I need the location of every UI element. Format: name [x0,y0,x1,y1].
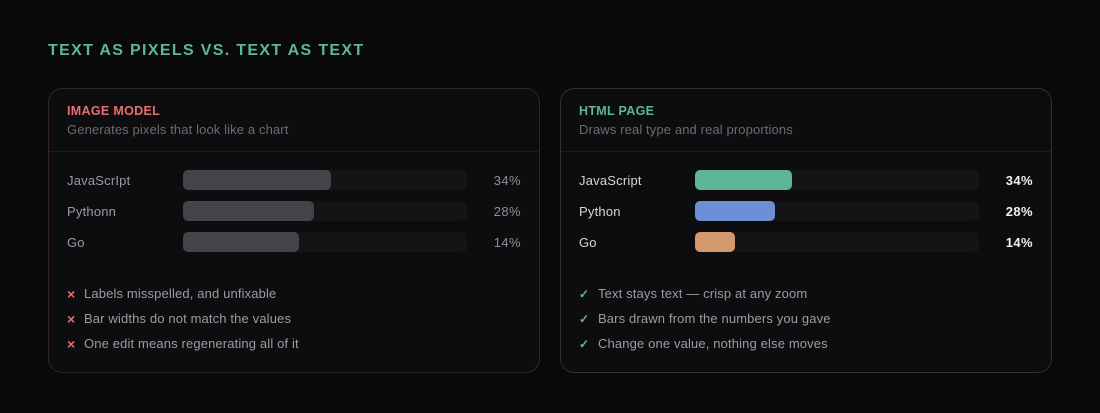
flaw 1: Labels misspelled, and unfixable [84,286,276,301]
bar: Go 14% grey [183,232,467,252]
label: Pythonn misspelled: Pythonn [67,204,116,219]
bar: Go 14% orange [695,232,979,252]
benefit 1: Text stays text — crisp at any zoom [598,286,807,301]
subheading: image model: Generates pixels that look like a chart [67,122,288,137]
value: 28%: 28% [494,204,521,219]
bar: Python 28% grey [183,201,467,221]
check mark 1: ✓ [579,287,589,301]
panel: html page [560,88,1052,373]
value: 28%: 28% [1006,204,1033,219]
label: Python: Python [579,204,621,219]
label: JavaScript misspelled: JavaScrIpt [67,173,130,188]
check mark 3: ✓ [579,337,589,351]
label: Go: Go [579,235,597,250]
check mark 2: ✓ [579,312,589,326]
value: 34%: 34% [1006,173,1033,188]
bar: JavaScript 34% grey [183,170,467,190]
label: Go: Go [67,235,85,250]
flaw 3: One edit means regenerating all of it [84,336,299,351]
subheading: html page: Draws real type and real proportions [579,122,793,137]
bar: JavaScript 34% green [695,170,979,190]
cross mark 1: × [67,286,75,302]
cross mark 2: × [67,311,75,327]
value: 34%: 34% [494,173,521,188]
benefit 3: Change one value, nothing else moves [598,336,828,351]
title: TEXT AS PIXELS VS. TEXT AS TEXT [48,42,365,59]
flaw 2: Bar widths do not match the values [84,311,291,326]
benefit 2: Bars drawn from the numbers you gave [598,311,831,326]
heading: html page: HTML PAGE [579,104,654,118]
bar: Python 28% blue [695,201,979,221]
label: JavaScript: JavaScript [579,173,642,188]
cross mark 3: × [67,336,75,352]
value: 14%: 14% [1006,235,1033,250]
value: 14%: 14% [494,235,521,250]
heading: image model: IMAGE MODEL [67,104,160,118]
panel: image model [48,88,540,373]
